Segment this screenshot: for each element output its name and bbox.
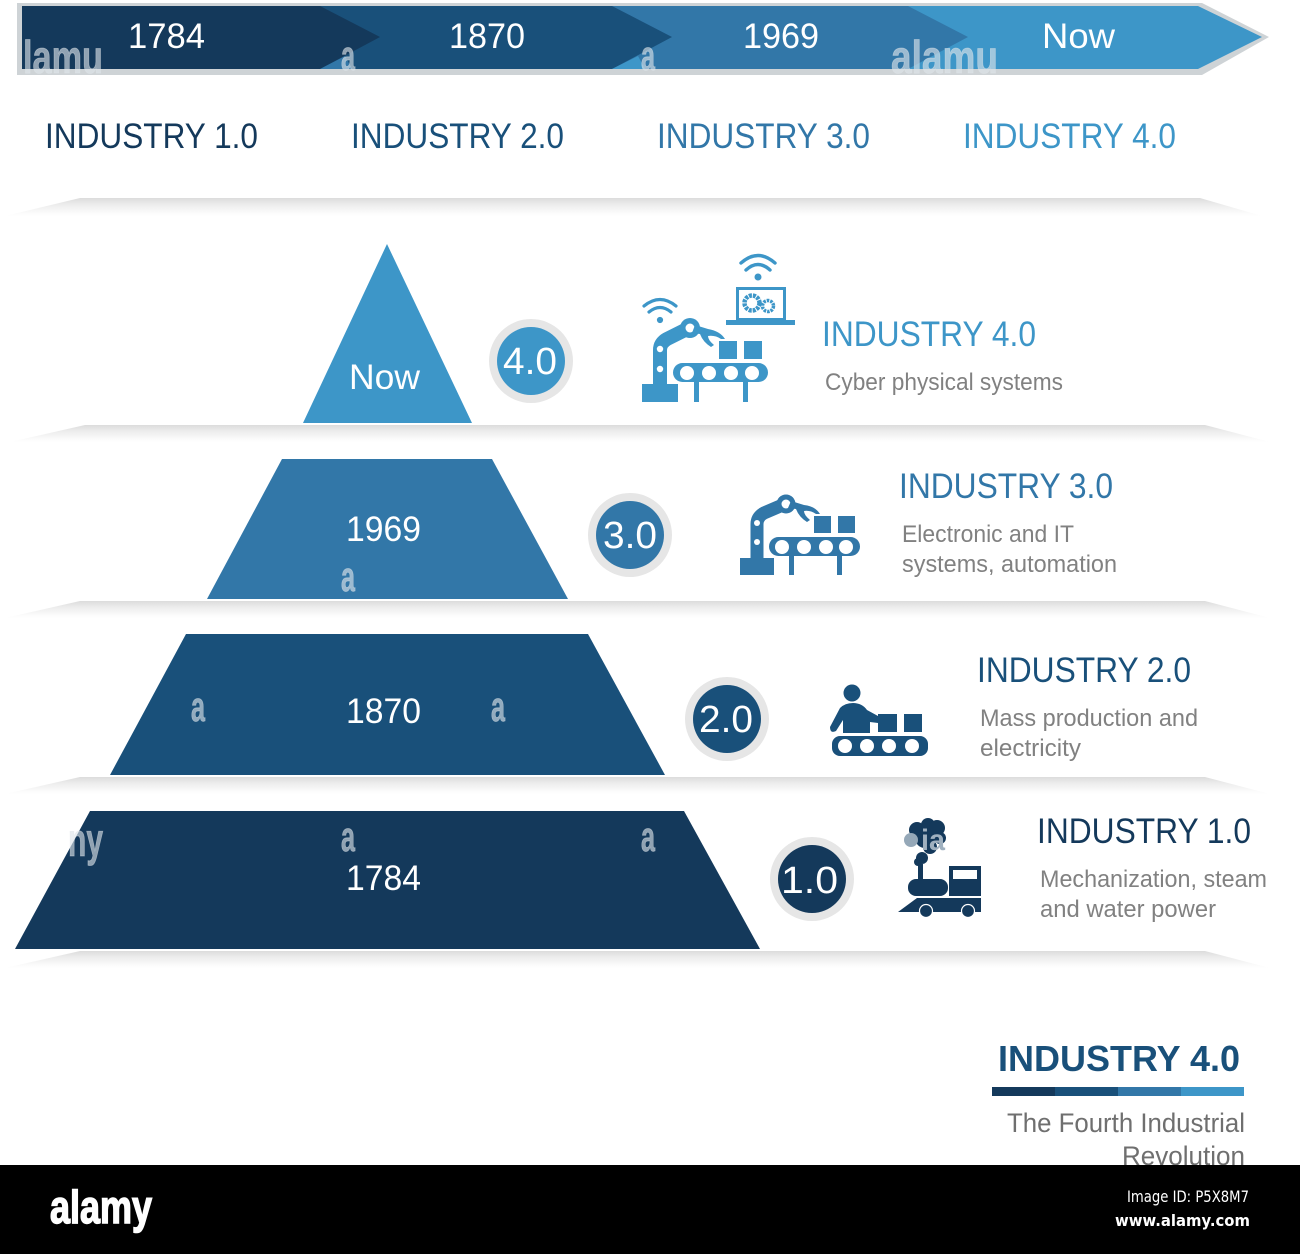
pyramid tier: 1784: 1784 xyxy=(346,859,421,898)
text block: industry 2.0: Mass production and xyxy=(980,705,1198,732)
smoke: ia xyxy=(921,824,945,857)
pyramid tier: 1784 xyxy=(15,811,760,949)
pyramid tier: 1870 xyxy=(110,634,665,775)
text block: industry 2.0: INDUSTRY 2.0 xyxy=(977,651,1191,690)
wifi right xyxy=(741,256,775,279)
watermark fragments: a xyxy=(341,32,355,79)
text block: industry 2.0: electricity xyxy=(980,735,1081,762)
badge: 3.0 xyxy=(588,493,672,577)
watermark fragments: a xyxy=(191,683,205,730)
icon: steam train xyxy=(898,818,981,918)
subtitle xyxy=(1007,1108,1245,1171)
heading: industry 2.0: INDUSTRY 2.0 xyxy=(351,117,564,156)
icon: robot arm with wifi and laptop xyxy=(642,256,795,402)
text block: industry 3.0: systems, automation xyxy=(902,551,1117,578)
year: 1784: 1784 xyxy=(128,17,205,56)
watermark fragments xyxy=(23,31,998,866)
watermark fragments: a xyxy=(491,683,505,730)
icon: worker at conveyor xyxy=(830,684,928,756)
watermark fragments: ny xyxy=(68,814,103,866)
watermark fragments: a xyxy=(641,32,655,79)
text block: industry 1.0: INDUSTRY 1.0 xyxy=(1037,812,1251,851)
pyramid tier: 1969: 1969 xyxy=(346,510,421,549)
year: 1870: 1870 xyxy=(449,17,525,56)
heading: industry 4.0: INDUSTRY 4.0 xyxy=(963,117,1176,156)
timeline arrow xyxy=(17,3,1269,75)
text block: industry 1.0: Mechanization, steam xyxy=(1040,866,1267,893)
site address: www.alamy.com xyxy=(1115,1211,1250,1230)
badge: 4.0: 4.0 xyxy=(503,341,557,383)
badge: 1.0: 1.0 xyxy=(781,860,838,902)
title: INDUSTRY 4.0 xyxy=(998,1038,1240,1079)
text block: industry 1.0 xyxy=(1037,812,1267,923)
text block: industry 1.0: and water power xyxy=(1040,896,1216,923)
subtitle: The Fourth Industrial xyxy=(1007,1108,1245,1138)
text block: industry 4.0: INDUSTRY 4.0 xyxy=(822,315,1036,354)
pyramid tier: now: Now xyxy=(349,358,421,397)
text block: industry 3.0: Electronic and IT xyxy=(902,521,1074,548)
wifi left xyxy=(644,300,676,322)
icon: robot arm on conveyor xyxy=(740,494,860,575)
badge: 3.0: 3.0 xyxy=(603,515,657,557)
laptop with gears xyxy=(726,288,795,325)
footer logo: alamy xyxy=(50,1181,152,1233)
year: 1969: 1969 xyxy=(743,17,819,56)
robot and conveyor xyxy=(642,318,768,402)
subtitle: Revolution xyxy=(1122,1141,1245,1171)
badge: 4.0 xyxy=(489,319,573,403)
text block: industry 4.0: Cyber physical systems xyxy=(825,369,1063,396)
title block xyxy=(992,1038,1245,1171)
colour bar xyxy=(992,1087,1244,1096)
label: Now: Now xyxy=(1042,17,1116,56)
pyramid tier: 1870: 1870 xyxy=(346,692,421,731)
heading: industry 3.0: INDUSTRY 3.0 xyxy=(657,117,870,156)
text block: industry 2.0 xyxy=(977,651,1198,762)
badge: 1.0 xyxy=(770,837,854,921)
pyramid tier: 1969 xyxy=(207,459,568,599)
watermark fragments: a xyxy=(341,553,355,600)
text block: industry 4.0 xyxy=(822,315,1063,396)
heading: industry 1.0: INDUSTRY 1.0 xyxy=(45,117,258,156)
image id: Image ID: P5X8M7 xyxy=(1127,1187,1249,1206)
watermark fragments: a xyxy=(341,813,355,860)
era headings row xyxy=(45,117,1176,156)
badge: 2.0 xyxy=(685,677,769,761)
pyramid tier: now xyxy=(303,244,472,423)
footer bar xyxy=(0,1165,1300,1254)
watermark fragments: alamu xyxy=(891,31,998,83)
text block: industry 3.0: INDUSTRY 3.0 xyxy=(899,467,1113,506)
watermark fragments: lamu xyxy=(23,31,103,83)
badge: 2.0: 2.0 xyxy=(699,699,753,741)
watermark fragments: a xyxy=(641,813,655,860)
text block: industry 3.0 xyxy=(899,467,1117,578)
